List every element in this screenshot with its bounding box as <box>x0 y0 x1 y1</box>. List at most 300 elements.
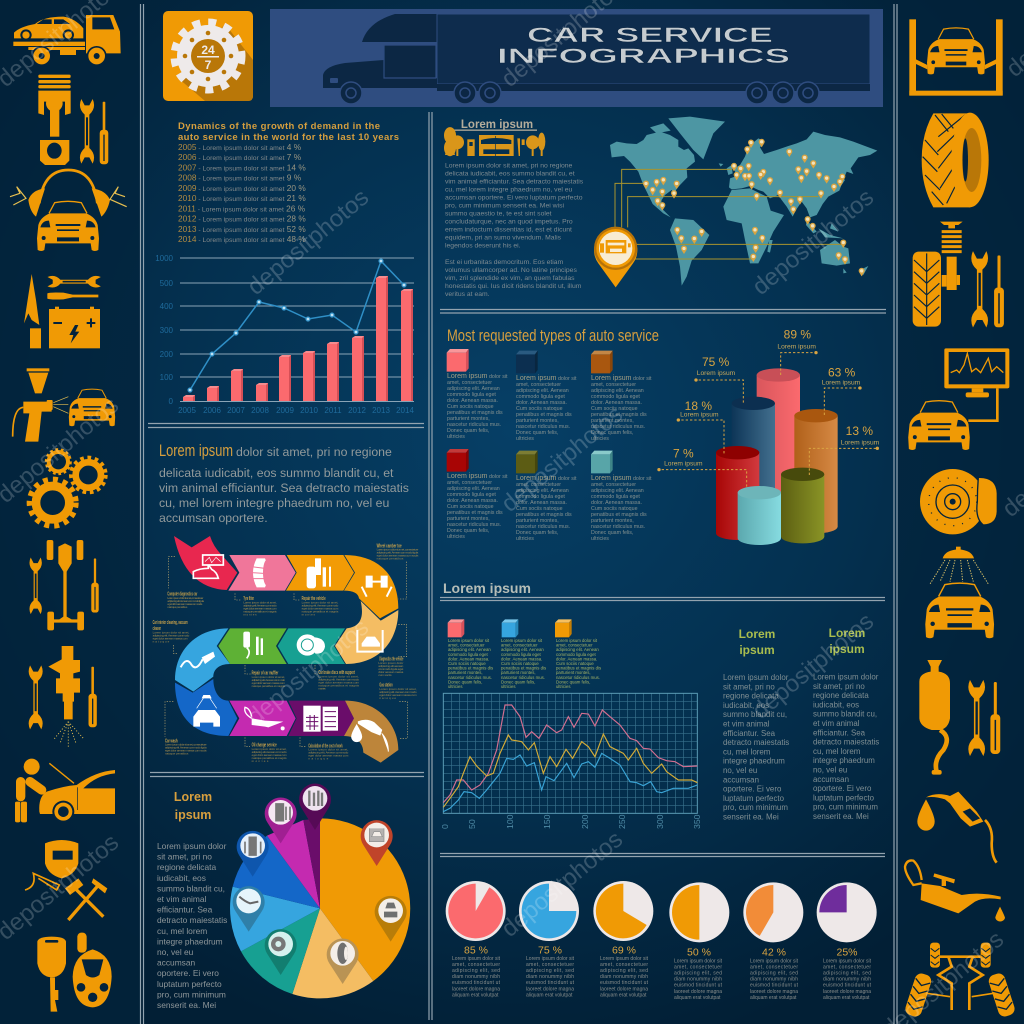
text block: right column: senserit ea. Mei <box>813 812 869 821</box>
legend text blocks: Lorem ipsum dolor sit <box>516 375 576 382</box>
text block: left column: no, vel eu <box>723 766 757 775</box>
step: interior cleaning <box>175 628 230 692</box>
world map <box>594 117 877 287</box>
pie captions <box>452 956 872 1001</box>
legend text blocks: nascetur ridiculus mus. <box>447 422 501 428</box>
heading: pie panel: ipsum <box>175 808 211 822</box>
heading: dynamics: auto service in the world for the last 10 years <box>178 132 399 143</box>
legend cubes <box>447 349 613 473</box>
icon: injector and tools <box>29 646 97 747</box>
text block: right column: oportere. Ei vero <box>813 784 872 793</box>
step: brake disc <box>278 628 345 664</box>
line chart legend text: nascetur ridiculus mus. <box>448 675 492 680</box>
timeline caption body text: cum sociis <box>378 673 392 677</box>
icon: wheel alignment <box>904 943 1016 1018</box>
bar chart: 2012 <box>348 406 366 415</box>
cylinder dashed leaders <box>659 353 877 487</box>
legend text blocks: adipiscing elit. Aenean <box>516 488 569 494</box>
timeline caption body text: adipiscing elit. Aenean commodo <box>379 690 417 694</box>
legend text blocks: parturient montes, <box>447 416 490 422</box>
legend text blocks: amet, consectetuer <box>447 380 492 386</box>
timeline caption body text: Lorem ipsum dolor sit amet, <box>302 600 338 604</box>
bar chart: 200 <box>160 350 174 359</box>
pie captions: diam nonummy nibh <box>526 974 574 980</box>
pie captions: amet, consectetuer <box>750 964 798 970</box>
text block: right column: cu, mel lorem <box>813 747 861 756</box>
icon: piston and tools <box>38 75 108 165</box>
icon: gears <box>29 450 106 526</box>
legend text blocks: dolor. Aenean massa. <box>447 398 498 404</box>
panel: line chart section <box>440 580 879 829</box>
line chart legend text: Donec quam felis, <box>448 679 482 684</box>
line chart legend text: amet, consectetuer <box>556 643 593 648</box>
timeline caption body text: natoque <box>379 696 396 700</box>
timeline caption body text: eget dolor aenean massa cum <box>252 681 285 685</box>
icon: car on lift <box>909 19 1003 96</box>
text block: yearly list: 2012 - Lorem ipsum dolor sit amet 28 % <box>178 214 306 224</box>
line chart axis labels: 300 <box>655 814 665 829</box>
text block: yearly list: 2006 - Lorem ipsum dolor sit amet 7 % <box>178 152 302 162</box>
timeline caption body text: montes <box>243 612 257 616</box>
legend text blocks: Lorem ipsum dolor sit <box>591 475 652 482</box>
cylinder percent labels: 63 % <box>828 366 856 380</box>
icon: mechanic at open hood <box>15 759 115 823</box>
pie captions: euismod tincidunt ut <box>750 982 799 988</box>
timeline captions: Repair the vehicle <box>302 596 326 602</box>
timeline captions: Wheel camber toe <box>377 543 402 549</box>
line chart legend text <box>448 638 601 689</box>
column heading: lorem ipsum left: Lorem <box>739 627 775 641</box>
timeline captions: Computer diagnostics car <box>167 592 198 598</box>
text block: right column: no, vel eu <box>813 766 847 774</box>
line chart legend text: Lorem ipsum dolor sit <box>501 638 543 643</box>
pie percentages: 69 % <box>612 944 636 956</box>
pie captions: diam nonummy nibh <box>750 976 798 982</box>
pie percentages: 42 % <box>762 946 786 958</box>
bar chart: 2011 <box>324 406 342 415</box>
pie captions: aliquam erat volutpat <box>526 993 573 999</box>
bar chart: 2010 <box>300 406 318 415</box>
timeline caption body text: Lorem ipsum dolor sit amet, <box>153 630 189 634</box>
line chart legend text: amet, consectetuer <box>448 643 485 648</box>
legend text blocks: ultricies <box>516 536 534 542</box>
legend text blocks: dolor. Aenean massa. <box>447 498 498 504</box>
legend text blocks: Donec quam felis, <box>447 528 489 534</box>
text block: map panel: vim, zril splendide ex vim, an quem fabulas <box>445 275 575 282</box>
text block: left column: pro, cum minimum <box>723 803 788 812</box>
timeline captions: Tyre fitter <box>243 596 254 602</box>
pie percentages: 50 % <box>687 946 711 958</box>
text block: left column: detracto maiestatis <box>723 738 789 747</box>
line chart legend text: penatibus et magnis dis <box>501 666 546 671</box>
watermarks: depositphotos <box>242 184 374 301</box>
pie captions: Lorem ipsum dolor sit <box>750 958 799 964</box>
line chart legend cubes <box>448 619 572 637</box>
heading: map panel: Lorem ipsum <box>461 119 533 131</box>
column heading: lorem ipsum left: ipsum <box>739 643 775 657</box>
text block: map panel: volumus ullamcorper ad. No latine principes <box>445 267 577 274</box>
text block: pie panel: et vim animal <box>157 894 206 904</box>
text block: yearly list: 2011 - Lorem ipsum dolor sit amet 26 % <box>178 204 306 214</box>
pie captions: laoreet dolore magna <box>600 986 648 992</box>
timeline caption body text: natoque penatibus <box>167 605 188 609</box>
timeline caption body text: eget dolor aenean massa cum <box>153 636 188 640</box>
legend text blocks: commodo ligula eget <box>591 394 640 400</box>
text block: map panel: summo quaestio te, te est sint solet <box>445 210 552 218</box>
panel: service pie chart <box>157 783 410 1010</box>
text block: intro paragraph: cu, mel lorem integre phaedrum no, vel eu <box>159 496 390 510</box>
step: calculation <box>288 701 354 736</box>
pie captions: laoreet dolore magna <box>823 989 871 995</box>
pie percentages <box>464 944 858 958</box>
icon: battery clamp and tools <box>24 274 101 348</box>
text block: map panel: legendos deserunt his ei. <box>445 242 521 250</box>
bar chart: 300 <box>160 326 174 335</box>
3D cylinder chart: Lorem ipsum <box>841 439 880 446</box>
text block: map panel: Lorem ipsum dolor sit amet, pri no regione <box>445 162 573 170</box>
text block: right column: regione delicata <box>813 691 869 700</box>
line chart legend text: Lorem ipsum dolor sit <box>556 638 598 643</box>
3D cylinder chart: Lorem ipsum <box>822 379 861 386</box>
legend text blocks: Donec quam felis, <box>447 428 489 434</box>
text block: left column: luptatum perfecto <box>723 794 785 803</box>
bar chart: 0 <box>169 397 174 406</box>
pie captions: euismod tincidunt ut <box>674 982 723 988</box>
legend text blocks: Lorem ipsum dolor sit <box>447 473 508 480</box>
legend text blocks: adipiscing elit. Aenean <box>447 386 500 392</box>
legend text blocks: nascetur ridiculus mus. <box>591 424 645 430</box>
pie captions: euismod tincidunt ut <box>823 982 872 988</box>
text block: pie panel: iudicabit, eos <box>157 873 206 883</box>
watermarks: depositphotos <box>747 608 879 725</box>
timeline caption body text: eget dolor aenean massa cum sociis <box>377 554 419 558</box>
icon: computer diagnostics <box>908 348 1009 450</box>
legend text blocks: nascetur ridiculus mus. <box>516 424 570 430</box>
text block: right column: detracto maiestatis <box>813 738 879 747</box>
text block: intro paragraph: accumsan oportere. <box>159 511 268 525</box>
step: car wash <box>175 679 237 736</box>
legend text blocks: penatibus et magnis dis <box>447 510 503 516</box>
bar chart: 100 <box>160 373 174 382</box>
legend text blocks: Cum sociis natoque <box>447 404 494 410</box>
line chart legend text: dolor. Aenean massa. <box>501 656 542 661</box>
legend text blocks: parturient montes, <box>516 518 559 524</box>
icon: 24/7 gear badge: 24 <box>201 43 215 57</box>
text block: left column: integre phaedrum <box>723 757 785 766</box>
timeline caption body text: natoque penatibus <box>165 752 189 756</box>
legend text blocks: ultricies <box>447 434 465 440</box>
watermarks: depositphotos <box>496 401 628 518</box>
line chart axis labels: 350 <box>692 814 702 829</box>
line chart legend text: Lorem ipsum dolor sit <box>448 638 490 643</box>
icon: spray gun and car <box>13 368 115 442</box>
text block: pie panel: pro, cum minimum <box>157 989 226 999</box>
timeline caption body text: eget dolor aenean massa cum <box>379 693 417 697</box>
legend text blocks: commodo ligula eget <box>516 394 565 400</box>
line chart axis labels: 100 <box>505 814 515 829</box>
heading: most requested: Most requested types of auto service <box>447 326 659 345</box>
3D cylinder chart <box>657 327 880 545</box>
line chart legend text: penatibus et magnis dis <box>448 666 493 671</box>
timeline caption body text: Lorem ipsum dolor sit amet, <box>379 687 417 691</box>
bar chart: 2007 <box>227 406 245 415</box>
legend text blocks: nascetur ridiculus mus. <box>591 524 645 530</box>
text block: right column: luptatum perfecto <box>813 793 875 802</box>
text block: map panel: Est ei urbanitas democritum. Eos etiam <box>445 259 564 266</box>
timeline caption body text: natoque penatibus et magnis <box>318 683 359 687</box>
text block: left column: iudicabit, eos <box>723 701 769 710</box>
legend text blocks: dolor. Aenean massa. <box>591 500 642 506</box>
text block: right column: iudicabit, eos <box>813 700 859 709</box>
timeline captions: Car wash <box>165 738 178 744</box>
pie captions: Lorem ipsum dolor sit <box>823 958 872 964</box>
text block: pie panel: oportere. Ei vero <box>157 968 219 978</box>
legend text blocks <box>447 373 652 542</box>
timeline caption body text: Lorem ipsum dolor sit amet, <box>252 747 287 751</box>
pie captions: amet, consectetuer <box>600 962 648 968</box>
timeline captions: Car brake discs with support <box>318 670 355 676</box>
line chart axis labels <box>440 814 702 829</box>
pie captions: Lorem ipsum dolor sit <box>526 956 575 962</box>
panel: snake service timeline <box>153 536 419 763</box>
pie percentages: 25% <box>836 946 858 958</box>
text block: yearly list: 2005 - Lorem ipsum dolor sit amet 4 % <box>178 142 302 152</box>
step: tyre fitting <box>228 555 296 591</box>
timeline caption body text: adipiscing elit. Aenean commodo <box>308 751 349 755</box>
pie captions: aliquam erat volutpat <box>600 993 647 999</box>
pie captions: laoreet dolore magna <box>674 989 722 995</box>
line chart axis labels: 0 <box>440 824 450 829</box>
line chart legend text: dolor. Aenean massa. <box>556 656 597 661</box>
bar chart: 2006 <box>203 406 221 415</box>
text block: pie panel: accumsan <box>157 958 196 968</box>
pie captions: amet, consectetuer <box>452 962 500 968</box>
pie captions: euismod tincidunt ut <box>526 980 575 986</box>
text block: right column: summo blandit cu, <box>813 710 877 719</box>
legend text blocks: commodo ligula eget <box>516 494 565 500</box>
line chart legend text: ultricies <box>556 684 571 689</box>
icon: car key and remote <box>37 933 112 1012</box>
timeline caption body text: natoque <box>308 757 329 761</box>
legend text blocks: penatibus et magnis dis <box>591 512 647 518</box>
timeline captions <box>153 543 403 749</box>
step: diagnostics lift <box>335 601 398 664</box>
text block: map panel: cu, mel lorem integre phaedrum no, vel eu <box>445 186 573 194</box>
line chart axis labels: 200 <box>580 814 590 829</box>
line chart legend text: ultricies <box>501 684 516 689</box>
pie captions: aliquam erat volutpat <box>452 993 499 999</box>
legend text blocks: penatibus et magnis dis <box>516 412 572 418</box>
text block: left column: cu, mel lorem <box>723 747 771 756</box>
legend text blocks: dolor. Aenean massa. <box>516 500 567 506</box>
text block: yearly list: 2009 - Lorem ipsum dolor sit amet 20 % <box>178 183 306 193</box>
text block: map panel: equidem, pri an sumo vivendum. Malis <box>445 234 562 242</box>
icon: car wash <box>925 547 994 638</box>
legend text blocks: penatibus et magnis dis <box>516 512 572 518</box>
line chart legend text: commodo ligula eget <box>448 652 488 657</box>
timeline caption body text: montes <box>318 686 326 690</box>
timeline caption body text: adipiscing elit. Aenean commodo <box>252 678 285 682</box>
text block: pie panel: summo blandit cu, <box>157 883 225 893</box>
legend text blocks: Donec quam felis, <box>516 530 558 536</box>
text block: pie panel: Lorem ipsum dolor <box>157 841 227 851</box>
icon: tow truck <box>13 15 121 66</box>
bar chart: 1000 <box>155 254 174 263</box>
legend text blocks: commodo ligula eget <box>591 494 640 500</box>
line chart legend text: adipiscing elit. Aenean <box>501 647 544 652</box>
timeline caption body text: eget dolor aenean massa cum sociis <box>167 602 203 606</box>
step: muffler repair <box>218 628 287 664</box>
timeline caption body text: Lorem ipsum dolor sit amet, consectetuer <box>377 548 418 552</box>
timeline caption body text: Lorem ipsum dolor sit amet, <box>308 748 348 752</box>
text block: pie panel: integre phaedrum <box>157 936 223 946</box>
text block: right column: accumsan <box>813 775 849 784</box>
legend text blocks: Cum sociis natoque <box>447 504 494 510</box>
map connector lines <box>615 169 841 259</box>
timeline captions: cleaner <box>153 626 161 632</box>
timeline caption body text: eget dolor aenean massa cum sociis <box>165 749 207 753</box>
timeline caption body text: montes <box>302 612 315 616</box>
cylinder percent labels: 75 % <box>702 355 730 369</box>
legend text blocks: penatibus et magnis dis <box>447 410 503 416</box>
timeline caption body text: adipiscing elit. Aenean commodo ligula <box>167 599 204 603</box>
text block: left column: et vim animal <box>723 720 770 728</box>
timeline caption body text <box>153 548 419 763</box>
legend text blocks: ultricies <box>591 536 609 542</box>
text block: map panel: delicata iudicabit, eos summo blandit cu, et <box>445 170 575 178</box>
text block: pie panel: sit amet, pri no <box>157 852 212 862</box>
3D cylinder chart: Lorem ipsum <box>664 460 703 467</box>
timeline caption body text: eget dolor aenean massa cum <box>318 680 359 684</box>
timeline caption body text: adipiscing elit. Aenean commodo <box>318 677 359 681</box>
line chart legend text: nascetur ridiculus mus. <box>501 675 545 680</box>
heading: dynamics: Dynamics of the growth of demand in the <box>178 121 380 132</box>
timeline caption body text: adipiscing elit aenean <box>378 664 404 668</box>
line chart axis labels: 250 <box>617 814 627 829</box>
text block: left column: efficiantur. Sea <box>723 729 776 738</box>
column heading: lorem ipsum right: Lorem <box>829 626 865 640</box>
step: gas station <box>344 701 398 763</box>
line chart legend text: dolor. Aenean massa. <box>448 656 489 661</box>
legend text blocks: Lorem ipsum dolor sit <box>591 375 652 382</box>
title: CAR SERVICE <box>527 24 773 47</box>
pie pins <box>233 783 407 984</box>
timeline caption body text: adipiscing elit. Aenean commodo ligula <box>377 551 419 555</box>
icon: 24/7 gear badge <box>163 11 253 101</box>
panel: most requested services <box>447 326 880 545</box>
heading: pie panel: Lorem <box>174 790 212 804</box>
bar chart <box>155 254 414 415</box>
icon: chassis and tools <box>29 540 99 630</box>
timeline caption body text: adipiscing elit. Aenean commodo <box>153 633 190 637</box>
line chart legend text: parturient montes, <box>556 670 591 675</box>
text block: left column: summo blandit cu, <box>723 710 787 719</box>
text block: right column: Lorem ipsum dolor <box>813 672 879 682</box>
heading: line chart section: Lorem ipsum <box>443 580 531 596</box>
pie captions: adipiscing elit, sed <box>674 970 722 976</box>
timeline caption body text: Lorem ipsum dolor sit amet, <box>318 674 359 678</box>
text block: right column: integre phaedrum <box>813 756 875 765</box>
cylinder percent labels <box>673 327 873 460</box>
text block: left column: senserit ea. Mei <box>723 812 779 822</box>
bar chart: 2014 <box>396 406 414 415</box>
text block: map panel: accumsan oportere. Ei vero luptatum perfecto <box>445 194 583 202</box>
timeline caption body text: adipiscing elit. Aenean commodo <box>252 750 287 754</box>
pie captions: Lorem ipsum dolor sit <box>452 956 501 962</box>
panel: world map <box>444 117 877 298</box>
legend text blocks: parturient montes, <box>447 516 490 522</box>
cylinder percent labels: 89 % <box>784 327 811 341</box>
pie captions: amet, consectetuer <box>823 964 871 970</box>
timeline caption body text: montes <box>252 759 269 763</box>
legend text blocks: Cum sociis natoque <box>516 506 563 512</box>
step: repair the vehicle <box>286 555 354 591</box>
right icon column <box>904 19 1016 1018</box>
legend text blocks: amet, consectetuer <box>591 482 636 488</box>
pie captions: euismod tincidunt ut <box>452 980 501 986</box>
text block: map panel: concludaturque, nec an quod impetus. Pro <box>445 218 573 226</box>
pie captions: adipiscing elit, sed <box>526 968 574 974</box>
legend text blocks: commodo ligula eget <box>447 392 496 398</box>
icon: muffler and tools <box>919 660 1000 775</box>
timeline captions: Repair of car muffler <box>252 671 279 677</box>
pie row <box>446 881 877 942</box>
legend text blocks: Lorem ipsum dolor sit <box>447 373 508 380</box>
text block: left column: Lorem ipsum dolor <box>723 673 789 682</box>
cylinder percent labels: 7 % <box>673 446 694 460</box>
pie percentages: 85 % <box>464 944 488 956</box>
legend text blocks: adipiscing elit. Aenean <box>591 388 644 394</box>
line chart legend text: Cum sociis natoque <box>501 661 539 666</box>
text block: map panel: pro, cum minimum senserit ea. Mei wisi <box>445 202 564 210</box>
line chart legend text: nascetur ridiculus mus. <box>556 675 600 680</box>
legend text blocks: parturient montes, <box>591 418 634 424</box>
timeline caption body text: Lorem ipsum dolor <box>378 661 403 665</box>
legend text blocks: adipiscing elit. Aenean <box>516 388 569 394</box>
pie percentages: 75 % <box>538 944 562 956</box>
timeline caption body text: natoque <box>153 639 170 643</box>
text block: right column: efficiantur. Sea <box>813 728 866 737</box>
timeline caption body text: Lorem ipsum dolor sit amet, <box>252 675 285 679</box>
timeline caption body text: adipiscing elit. Aenean commodo ligula <box>165 746 207 750</box>
legend text blocks: adipiscing elit. Aenean <box>591 488 644 494</box>
icon: large location pin with garage <box>594 227 637 287</box>
timeline caption body text: natoque penatibus <box>377 557 404 561</box>
text block: left column: oportere. Ei vero <box>723 785 782 794</box>
pie captions: Lorem ipsum dolor sit <box>674 958 723 964</box>
watermarks: depositphotos <box>747 184 879 301</box>
text block: intro paragraph: Lorem ipsum <box>159 441 233 460</box>
map location pins <box>643 139 865 276</box>
timeline captions: Calculation of the cost of work <box>308 743 343 749</box>
pie captions: adipiscing elit, sed <box>600 968 648 974</box>
3D cylinder chart: Lorem ipsum <box>697 370 736 377</box>
line chart legend text: commodo ligula eget <box>556 652 596 657</box>
title: INFOGRAPHICS <box>497 45 790 68</box>
pie captions: adipiscing elit, sed <box>823 970 871 976</box>
legend text blocks: parturient montes, <box>591 518 634 524</box>
text block: map panel: veritus at eam. <box>445 291 490 298</box>
pie captions: diam nonummy nibh <box>823 976 871 982</box>
legend text blocks: Donec quam felis, <box>591 430 633 436</box>
pie chart <box>230 783 410 998</box>
timeline caption body text: natoque penatibus et magnis <box>302 609 339 613</box>
text block: pie panel: detracto maiestatis <box>157 915 227 925</box>
pie captions: amet, consectetuer <box>674 964 722 970</box>
timeline caption body text: adipiscing elit. Aenean commodo <box>243 603 277 607</box>
legend text blocks: Cum sociis natoque <box>591 506 638 512</box>
text block: left column: accumsan <box>723 775 759 784</box>
